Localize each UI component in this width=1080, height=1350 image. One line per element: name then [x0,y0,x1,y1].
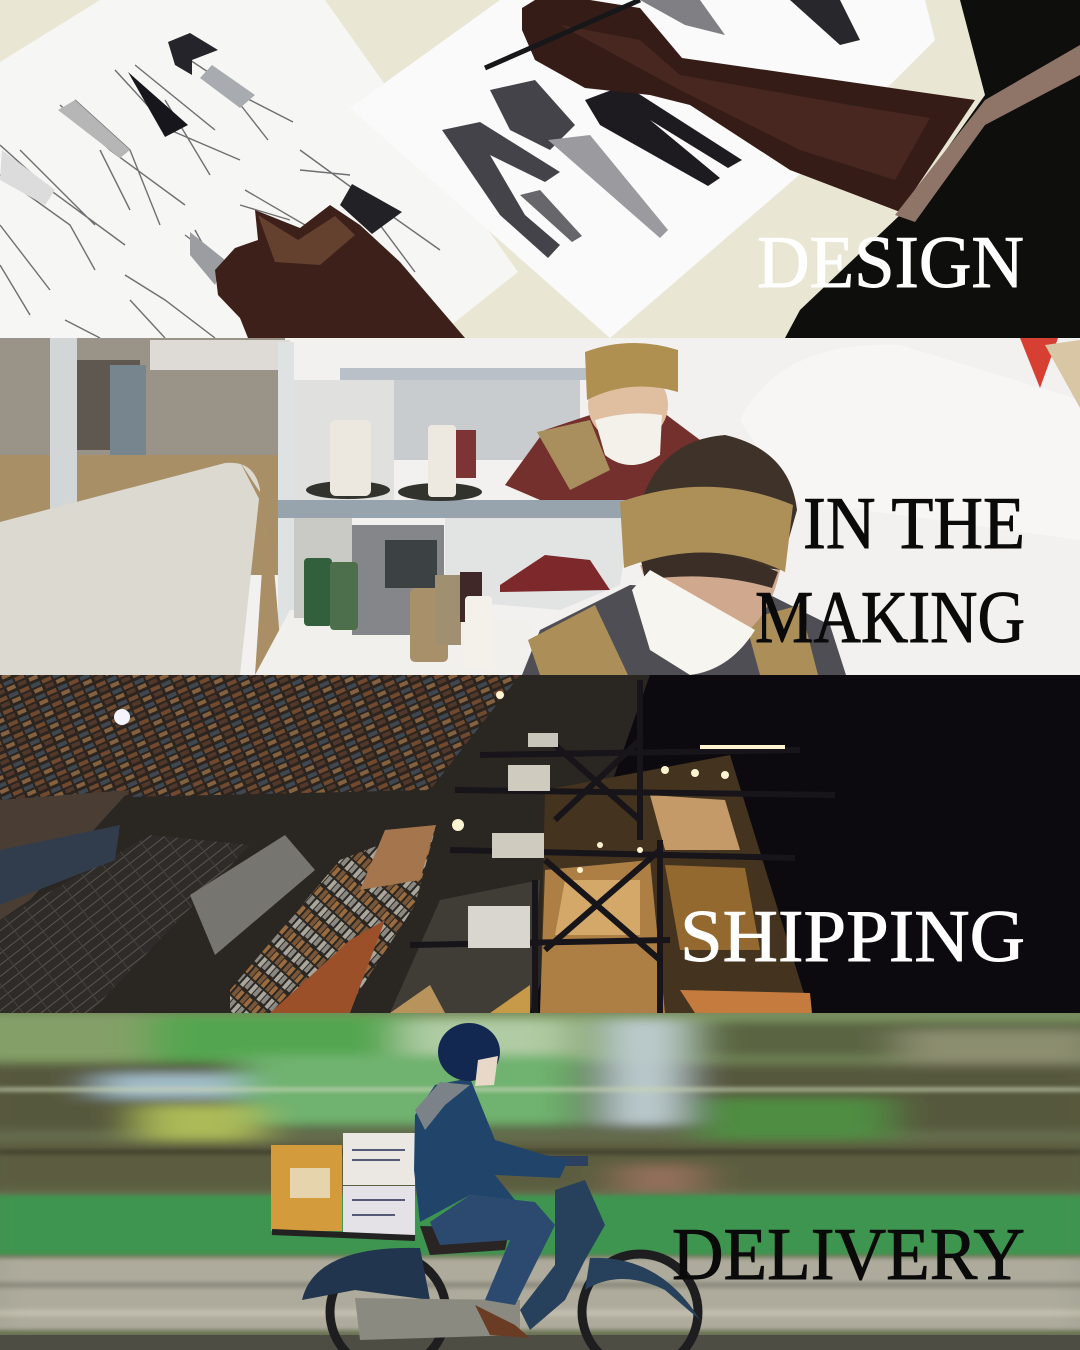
background worker [500,343,700,592]
moped [302,1156,700,1350]
heading: in the making: MAKING [755,577,1025,659]
heading: in the making: IN THE [803,483,1025,565]
panel: delivery [0,1012,1080,1350]
panel: in the making [0,338,1080,675]
sewing table [255,368,630,675]
panel: shipping [0,675,1080,1013]
sketch paper right [350,0,935,338]
boxes [271,1133,415,1238]
heading: shipping: SHIPPING [680,896,1025,978]
crane cabins [468,733,558,948]
ship [540,755,812,1013]
right arm and hand with pencil [485,0,975,212]
white fabric roll [0,463,260,675]
heading: delivery: DELIVERY [672,1214,1025,1296]
motion-blurred background [0,1012,1080,1350]
thread spools [304,420,492,668]
heading: design: DESIGN [757,222,1024,304]
container yard [0,675,650,1013]
factory background [0,338,294,630]
worker shoulder [785,0,1080,338]
cranes [410,680,835,1013]
foreground worker [522,435,846,675]
heading: in the making [755,483,1025,659]
left hand [215,205,465,338]
panel: design [0,0,1080,338]
port lights [114,691,785,873]
rider [414,1023,568,1338]
white fabric right [740,345,1080,540]
sketch paper left [0,0,518,338]
